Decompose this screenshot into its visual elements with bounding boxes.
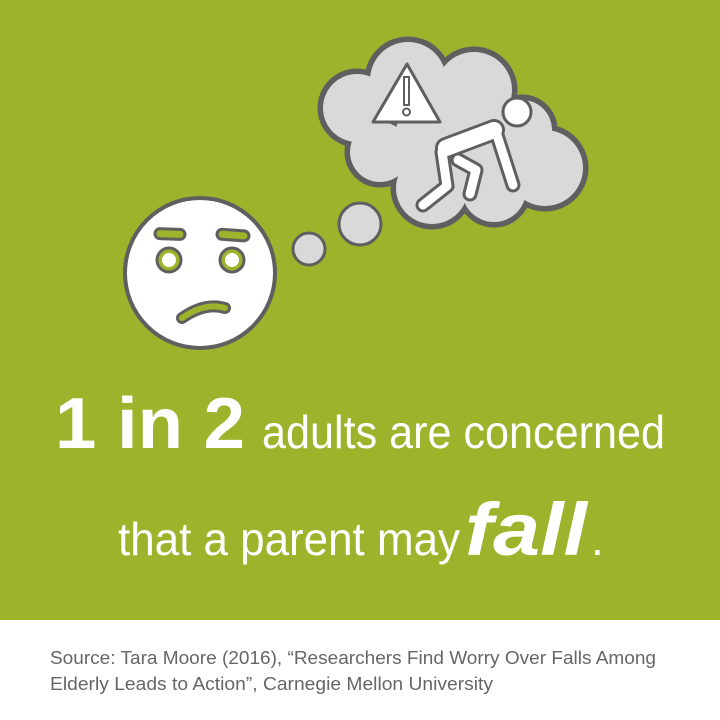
headline line 1 xyxy=(55,384,665,464)
headline line 1: adults are concerned xyxy=(262,406,665,458)
headline line 2: that a parent may xyxy=(118,513,460,565)
icon: warning xyxy=(373,64,440,122)
headline line 2: . xyxy=(591,513,604,565)
headline line 1: 1 in 2 xyxy=(55,384,245,464)
source text: Source: Tara Moore (2016), “Researchers Find Worry Over Falls Among xyxy=(50,648,656,668)
headline line 2 xyxy=(118,488,604,571)
icon: worried face xyxy=(125,198,275,348)
thought cloud xyxy=(321,40,585,226)
icon: falling person xyxy=(423,98,531,205)
source text xyxy=(50,648,656,694)
thought bubbles xyxy=(293,203,381,265)
headline line 2: fall xyxy=(465,488,589,571)
source text: Elderly Leads to Action”, Carnegie Mellon University xyxy=(50,674,493,694)
